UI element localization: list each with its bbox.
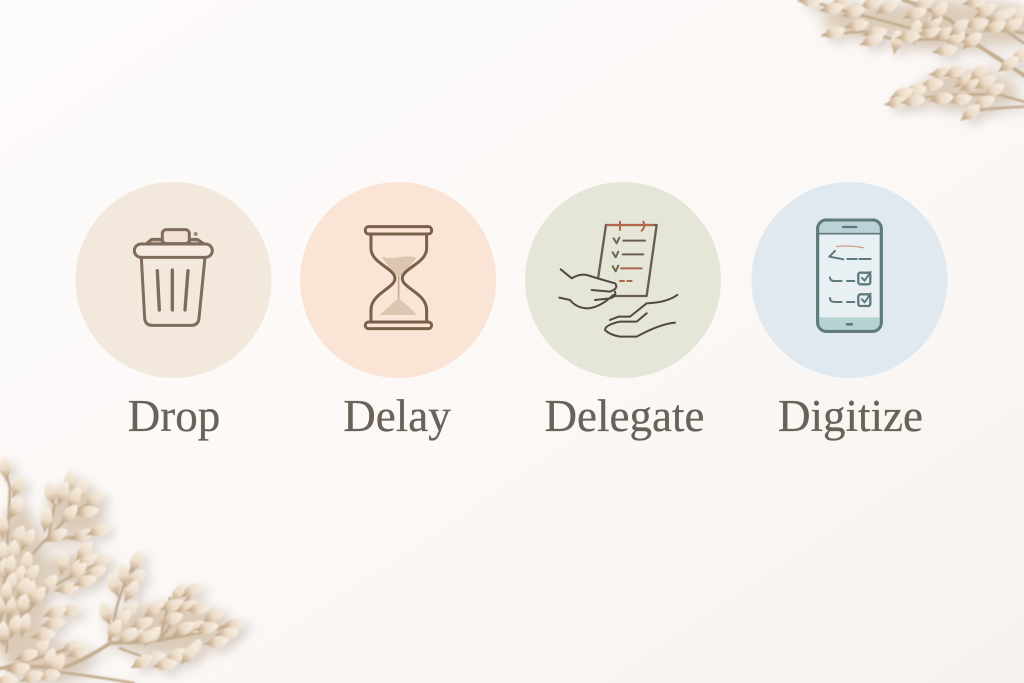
item: Delegate: [525, 182, 721, 441]
icon: hourglass: [365, 227, 432, 329]
circle: Delegate background: [525, 182, 721, 378]
label: Drop: Drop: [128, 391, 220, 441]
item: Digitize: [752, 182, 948, 441]
label: Digitize: Digitize: [778, 391, 923, 441]
icon: phone with checklist: [818, 220, 881, 331]
decorative sprig: top right: [796, 0, 1024, 126]
icon: trash can: [134, 230, 212, 325]
circle: Drop background: [76, 182, 272, 378]
label: Delegate: Delegate: [545, 391, 704, 441]
label: Delay: Delay: [343, 391, 451, 441]
decorative sprig: bottom left: [0, 456, 246, 683]
circle: Digitize background: [752, 182, 948, 378]
item: Delay: [300, 182, 496, 441]
icon: hands passing checklist: [559, 222, 677, 337]
item: Drop: [76, 182, 272, 441]
circle: Delay background: [300, 182, 496, 378]
